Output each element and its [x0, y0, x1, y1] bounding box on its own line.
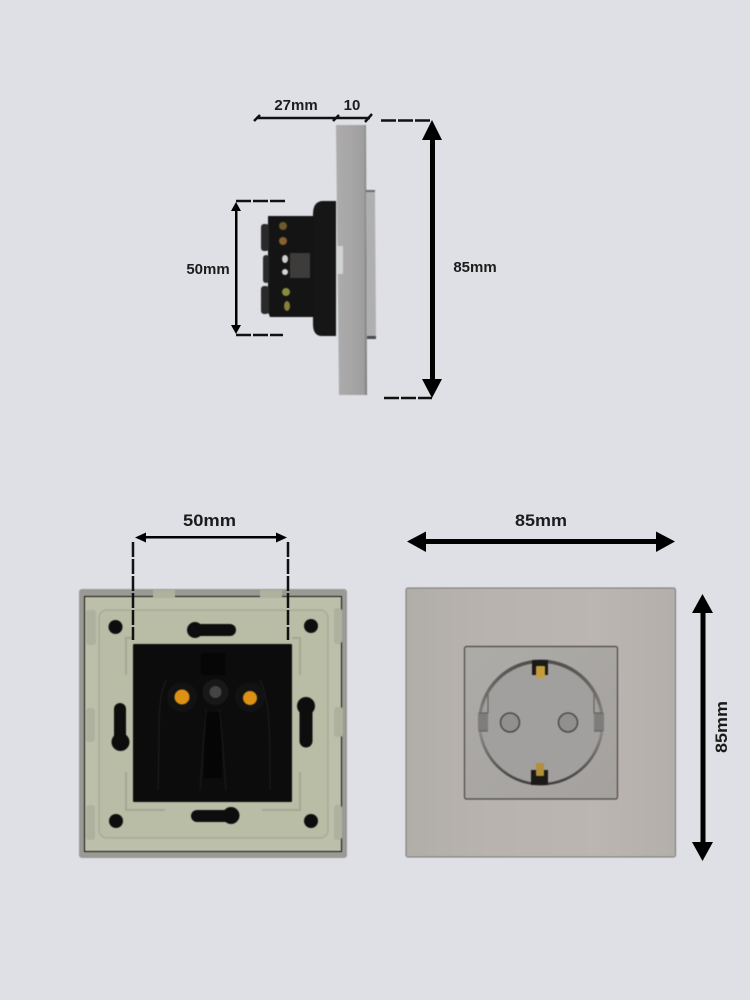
top earth contact: [532, 660, 548, 675]
label 27mm: 27mm: [274, 97, 318, 114]
dimension: 50mm height side: [186, 201, 286, 335]
label 50mm back: 50mm: [183, 511, 236, 530]
terminals: [279, 222, 290, 311]
label 85mm vertical: 85mm: [712, 701, 731, 753]
notch lines: [479, 694, 603, 731]
side view of socket: [261, 125, 376, 395]
brass contacts: [174, 690, 190, 704]
side notches: [478, 713, 604, 731]
front inner square: [464, 646, 618, 799]
front faceplate: [406, 588, 676, 857]
label 85mm side: 85mm: [453, 259, 497, 276]
dimension: 50mm width back: [133, 511, 288, 640]
keyhole slots: [112, 622, 315, 824]
screws: [261, 224, 269, 314]
frame tabs: [86, 590, 343, 840]
side clip: [337, 246, 343, 274]
side rear module: [366, 191, 376, 338]
label 10: 10: [344, 97, 360, 114]
black module: [133, 644, 292, 802]
dimension: 85mm height side: [381, 120, 497, 398]
side faceplate: [336, 125, 367, 395]
dimension: 85mm width front: [407, 511, 675, 552]
back green plate: [85, 597, 341, 851]
corner holes: [108, 619, 318, 828]
back view of socket: [79, 589, 347, 858]
back frame: [79, 589, 347, 858]
front view of socket: [406, 588, 676, 857]
black ring: [313, 201, 336, 336]
label 85mm front: 85mm: [515, 511, 567, 530]
terminal block: [268, 216, 314, 317]
dimension: 27mm and 10 depth: [254, 97, 372, 122]
bottom earth contact: [531, 770, 548, 785]
module details: [158, 653, 270, 790]
pin holes: [500, 713, 520, 732]
recess outlines: [126, 638, 300, 810]
socket recess: [478, 660, 604, 786]
label 50mm side: 50mm: [186, 261, 230, 278]
dimension: 85mm height front: [692, 594, 731, 861]
